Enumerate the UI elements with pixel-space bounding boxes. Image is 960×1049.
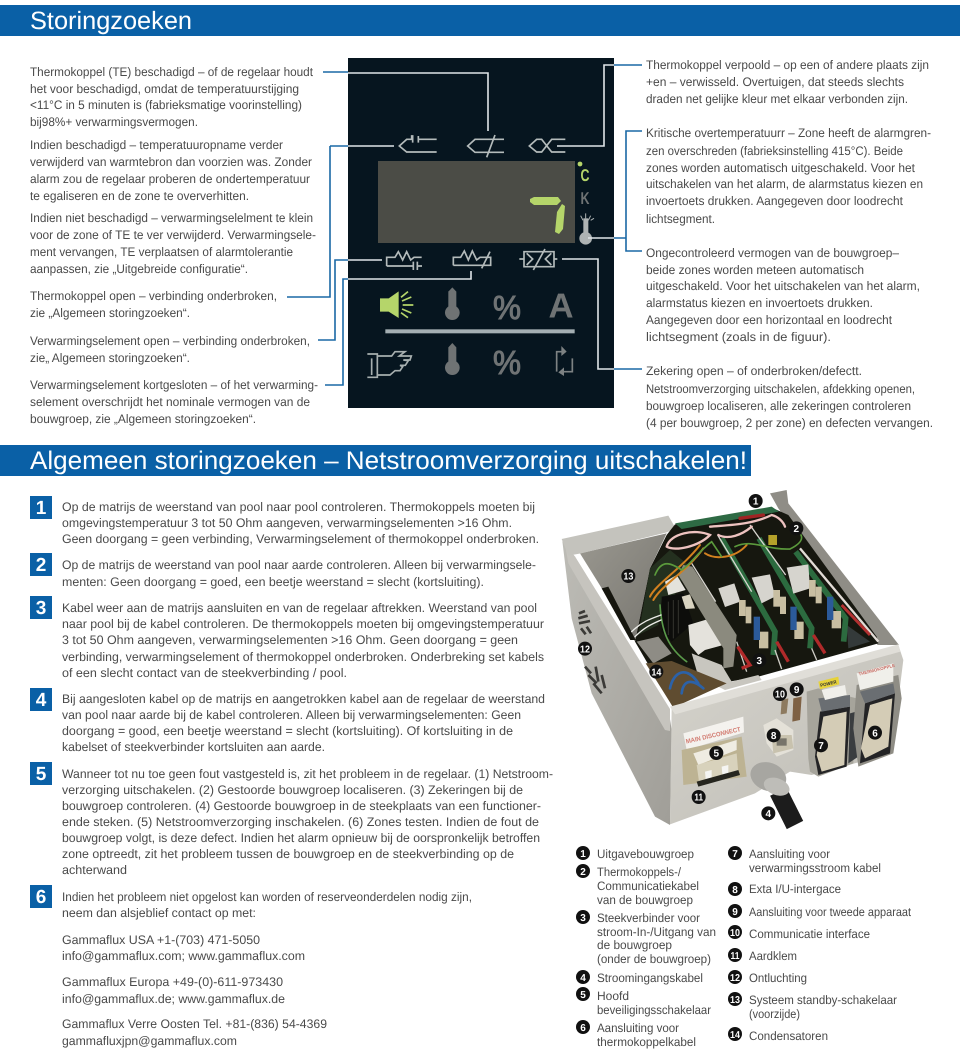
step 5: verzorging uitschakelen. (2) Gestoorde bouwgroep localiseren. (3) Zekeringen bij de [62,783,523,797]
main disconnect switch: MAIN DISCONNECT [685,726,741,745]
text block: right fault descriptions: Ongecontroleerd vermogen van de bouwgroep– [646,246,899,260]
photo callout numbers: 14 [651,667,661,678]
label: percent one: % [493,289,521,326]
text block: left fault descriptions: aanpassen, zie „Uitgebreide configuratie“. [30,262,248,276]
legend: right column: 12 [730,973,740,984]
text block: left fault descriptions: Indien beschadigd – temperatuuropname verder [30,138,283,152]
step 2: 2 [36,555,46,576]
enclosure top lip [562,516,676,556]
icon: thermocouple reversed [529,139,565,152]
panel: controller display [348,58,614,408]
main disconnect switch [682,717,747,787]
step 6 with contact details: Gammaflux Europa +49-(0)-611-973430 [62,975,283,989]
legend: left column: Hoofd [597,989,629,1003]
text block: right fault descriptions: Thermokoppel verpoold – op een of andere plaats zijn [646,58,929,72]
right wall [770,490,899,645]
icon: thermocouple open [399,136,437,152]
legend: left column: van de bouwgroep [597,893,693,907]
icon: thermocouple damaged [468,135,504,157]
photo callout numbers: 13 [623,571,633,582]
step 3: verbinding, verwarmingselement of thermokoppel onderbroken. Onderbreking set kabels [62,650,544,664]
text block: right fault descriptions: alarmstatus kiezen en invoertoets drukken. [646,296,873,310]
text block: right fault descriptions: beide zones worden meteen automatisch [646,263,864,277]
photo callout numbers: 12 [580,644,590,655]
step 1: Geen doorgang = geen verbinding, Verwarmingselement of thermokoppel onderbroken. [62,532,539,546]
step 4: doorgang = good, een beetje weerstand = slecht (kortsluiting). Of kortsluiting in de [62,724,513,738]
text block: right fault descriptions: uitschakelen van het alarm, de alarmstatus kiezen en [646,177,923,191]
icon: thermometer two [445,343,460,375]
legend: left column: 1 [580,849,586,860]
legend: left column: (onder de bouwgroep) [597,952,711,966]
photo callout numbers: 4 [766,808,771,819]
LCD screen with segment [378,161,575,243]
legend: left column: Thermokoppels-/ [597,865,682,879]
photo: hot runner controller unit with numbered callouts [562,490,903,825]
step 6 with contact details: Indien het probleem niet opgelost kan worden of reserveonderdelen nodig zijn, [62,890,472,904]
text block: right fault descriptions: (4 per bouwgroep, 2 per zone) en defecten vervangen. [646,416,933,430]
step 3: naar pool bij de kabel controleren. De thermokoppels moeten bij omgevingstemperatuur [62,617,544,631]
step 5 [30,762,553,877]
icons drawn in panel [367,135,594,381]
legend: right column: 9 [732,907,738,918]
text block: right fault descriptions: lichtsegment (zoals in de figuur). [646,330,831,344]
step 6 with contact details: info@gammaflux.com; www.gammaflux.com [62,949,305,963]
legend: right column: Exta I/U-intergace [749,882,841,896]
text block: left fault descriptions: bouwgroep, zie „Algemeen storingzoeken“. [30,412,256,426]
photo callout numbers [578,494,882,820]
legend: right column: 8 [732,885,738,896]
text block: left fault descriptions: voor de zone of TE te ver verwijderd. Verwarmingsele- [30,228,316,242]
text block: right fault descriptions: draden net gelijke kleur met elkaar verbonden zijn. [646,92,908,106]
legend: left column: Aansluiting voor [597,1021,679,1035]
text block: right fault descriptions: zones worden automatisch uitgeschakeld. Voor het [646,161,916,175]
connector port 8 [763,718,793,757]
connector 6 [853,663,902,767]
text block: right fault descriptions: bouwgroep localiseren, alle zekeringen controleren [646,399,911,413]
icon: fuse [519,249,557,270]
text block: right fault descriptions: Aangegeven door een horizontaal en loodrecht [646,313,893,327]
legend: left column: 2 [580,867,586,878]
divider bar [385,329,575,333]
legend: right column: Aardklem [749,949,797,963]
cable gland and power cable [746,757,795,825]
text block: left fault descriptions: selement overschrijdt het nominale vermogen van de [30,395,310,409]
text block: left fault descriptions: zie „Algemeen storingzoeken“. [30,306,190,320]
icon: heater damaged [453,251,491,268]
text block: left fault descriptions: Indien niet beschadigd – verwarmingselelment te klein [30,211,313,225]
legend: left column [576,846,716,1049]
step 4 [30,688,545,754]
legend: right column: Systeem standby-schakelaar [749,993,897,1007]
step 4: Bij aangesloten kabel op de matrijs en aangetrokken kabel aan de regelaar de weerstand [62,692,545,706]
step 2: menten: Geen doorgang = goed, een beetje weerstand = slecht (kortsluiting). [62,575,484,589]
icon: enter arrows [557,346,572,376]
legend: right column: 14 [730,1030,740,1041]
red cables [738,635,825,668]
step 3: Kabel weer aan de matrijs aansluiten en van de regelaar aftrekken. Weerstand van pool [62,601,537,615]
text block: left fault descriptions: <11°C in 5 minuten is (fabrieksmatige voorinstelling) [30,98,302,112]
text block: right fault descriptions: uitgeschakeld. Voor het uitschakelen van het alarm, [646,279,920,293]
text block: left fault descriptions: Verwarmingselement kortgesloten – of het verwarming- [30,378,318,392]
step 2 [30,553,536,589]
step 3: of een slecht contact van de steekverbinding / pool. [62,666,347,680]
step 3: 3 tot 50 Ohm aangeven, verwarmingselementen >16 Ohm. Geen doorgang = geen [62,633,518,647]
step 6 with contact details: gammafluxjpn@gammaflux.com [62,1034,237,1048]
legend: left column: 5 [580,990,586,1001]
text block: left fault descriptions: Verwarmingselement open – verbinding onderbroken, [30,334,310,348]
text block: left fault descriptions: Thermokoppel (TE) beschadigd – of de regelaar houdt [30,65,314,79]
text block: right fault descriptions: Netstroomverzorging uitschakelen, afdekking openen, [646,382,915,396]
icon: heater open [387,252,422,270]
gap between connectors [848,710,862,763]
text block: right fault descriptions: Zekering open – of onderbroken/defectt. [646,364,862,378]
text block: left fault descriptions: bij98%+ verwarmingsvermogen. [30,115,198,129]
text block: left fault descriptions: Thermokoppel open – verbinding onderbroken, [30,289,277,303]
title banner: Storingzoeken: Storingzoeken [30,7,192,35]
step 4: 4 [36,690,47,711]
step 5: zone optreedt, zit het probleem tussen de bouwgroep en de steekverbinding op de [62,847,514,861]
wiring bundles [632,515,802,662]
text block: left fault descriptions: verwijderd van warmtebron dan voorzien was. Zonder [30,155,312,169]
photo callout numbers: 7 [818,740,824,751]
legend: left column: stroom-In-/Uitgang van [597,925,716,939]
legend: left column: Communicatiekabel [597,879,699,893]
legend: left column: de bouwgroep [597,938,672,952]
step 6 with contact details: neem dan alsjeblief contact op met: [62,906,256,920]
photo callout numbers: 2 [794,523,799,534]
legend: left column: 6 [580,1023,586,1034]
left PCB [638,550,688,635]
legend: right column: Aansluiting voor tweede apparaat [749,905,912,919]
step 6 with contact details: Gammaflux USA +1-(703) 471-5050 [62,933,260,947]
step 1 [30,496,539,546]
photo callout numbers: 3 [757,655,762,666]
photo callout numbers: 11 [694,792,703,803]
label: percent two: % [493,344,521,381]
step 5: 5 [36,764,47,785]
photo callout numbers: 8 [771,730,776,741]
title banner: Storingzoeken [0,5,960,36]
text block: right fault descriptions: lichtsegment. [646,212,715,226]
step 1: 1 [36,498,47,519]
text block: left fault descriptions [30,65,318,426]
legend: left column: beveiligingsschakelaar [597,1003,711,1017]
text block: left fault descriptions: ment vervangen, TE verplaatsen of alarmtolerantie [30,245,293,259]
step 4: kabelset of steekverbinder kortsluiten aan aarde. [62,740,325,754]
connector lines from left text to panel [287,65,642,385]
step 3 [30,596,544,680]
step 5: Wanneer tot nu toe geen fout vastgesteld is, zit het probleem in de regelaar. (1) Netstroom- [62,767,553,781]
legend: right column: 10 [730,928,740,939]
legend: left column: Uitgavebouwgroep [597,847,694,861]
photo callout numbers: 9 [794,684,799,695]
front plate [670,645,903,824]
light ribbon and capacitors [692,653,762,690]
grey metal plate [678,565,737,668]
step 5: bouwgroep controleren. (4) Gestoorde bouwgroep in de steekplaats van een functioner- [62,799,541,813]
label: ampere: A [548,286,574,325]
relays [718,564,810,607]
text block: right fault descriptions [646,58,933,430]
cards with rails [692,525,846,672]
legend: left column: Steekverbinder voor [597,911,700,925]
text block: left fault descriptions: zie„ Algemeen storingzoeken“. [30,351,190,365]
legend: left column: Stroomingangskabel [597,971,703,985]
blue components [754,597,833,640]
step 6 with contact details: 6 [36,887,46,908]
icon: thermometer one [445,287,460,320]
legend: right column: (voorzijde) [749,1007,800,1021]
enclosure outer left wall [562,541,672,825]
step 4: van pool naar aarde bij de kabel controleren. Alleen bij verwarmingselementen: Geen [62,708,521,722]
legend: left column: 4 [580,973,586,984]
unit indicators C and K: C [580,166,590,185]
text block: right fault descriptions: invoertoets drukken. Aangegeven door loodrecht [646,194,904,208]
enclosure interior wall [580,533,667,642]
step 6 with contact details [30,885,472,1048]
photo callout numbers: 5 [714,748,719,759]
icon: speaker alarm [380,291,413,318]
interior boards area [635,508,878,708]
step 1: Op de matrijs de weerstand van pool naar pool controleren. Thermokoppels moeten bij [62,500,535,514]
connector lines from panel to right text [557,65,642,369]
step 3: 3 [36,598,46,619]
legend: left column: thermokoppelkabel [597,1035,696,1049]
connector 6: THERMOKOPPLE [858,663,896,677]
legend: right column: Communicatie interface [749,927,870,941]
vent stripes [578,611,605,693]
text block: left fault descriptions: alarm zou de regelaar proberen de ondertemperatuur [30,172,310,186]
text block: right fault descriptions: zen overschreden (fabrieksinstelling 415°C). Beide [646,144,903,158]
unit indicators C and K [578,162,590,208]
text block: left fault descriptions: te egaliseren en de zone te oververhitten. [30,189,249,203]
legend: right column: 7 [732,849,738,860]
connector 7: POWER [820,679,837,688]
legend: right column [728,846,912,1043]
legend: right column: Ontluchting [749,971,807,985]
step 2: Op de matrijs de weerstand van pool naar aarde controleren. Alleen bij verwarmingsele- [62,558,536,572]
text block: right fault descriptions: Kritische overtemperatuurr – Zone heeft de alarmgren- [646,126,931,140]
photo callout numbers: 10 [775,689,785,700]
step 5: achterwand [62,863,127,877]
unit indicators C and K: K [580,189,590,208]
section banner: Algemeen storingzoeken: Algemeen storingzoeken – Netstroomverzorging uitschakelen! [30,447,747,475]
connector 7 [807,677,857,777]
icon: alarm thermometer [579,213,594,245]
legend: right column: Aansluiting voor [749,847,830,861]
step 6 with contact details: Gammaflux Verre Oosten Tel. +81-(836) 54-4369 [62,1017,327,1031]
step 6 with contact details: info@gammaflux.de; www.gammaflux.de [62,992,285,1006]
legend: left column: 3 [580,913,586,924]
step 1: omgevingstemperatuur 3 tot 50 Ohm aangeven, verwarmingselementen >16 Ohm. [62,516,512,530]
photo callout numbers: 1 [753,496,758,507]
legend: right column: 13 [730,995,740,1006]
D-sub ports [781,697,802,722]
legend: right column: Condensatoren [749,1029,828,1043]
icon: pointing hand [367,352,411,377]
text block: left fault descriptions: het voor beschadigd, omdat de temperatuurstijging [30,82,299,96]
cream terminals [739,580,841,648]
step 5: bouwgroep volgt, is deze defect. Indien het alarm opnieuw bij de oorspronkelijk betroffen [62,831,540,845]
text block: right fault descriptions: +en – verwisseld. Overtuigen, dat steeds slechts [646,75,904,89]
legend: right column: 11 [730,951,740,962]
legend: right column: verwarmingsstroom kabel [749,861,881,875]
step 5: ende steken. (5) Netstroomverzorging inschakelen. (6) Zones testen. Indien de fout de [62,815,539,829]
photo callout numbers: 6 [872,728,878,739]
